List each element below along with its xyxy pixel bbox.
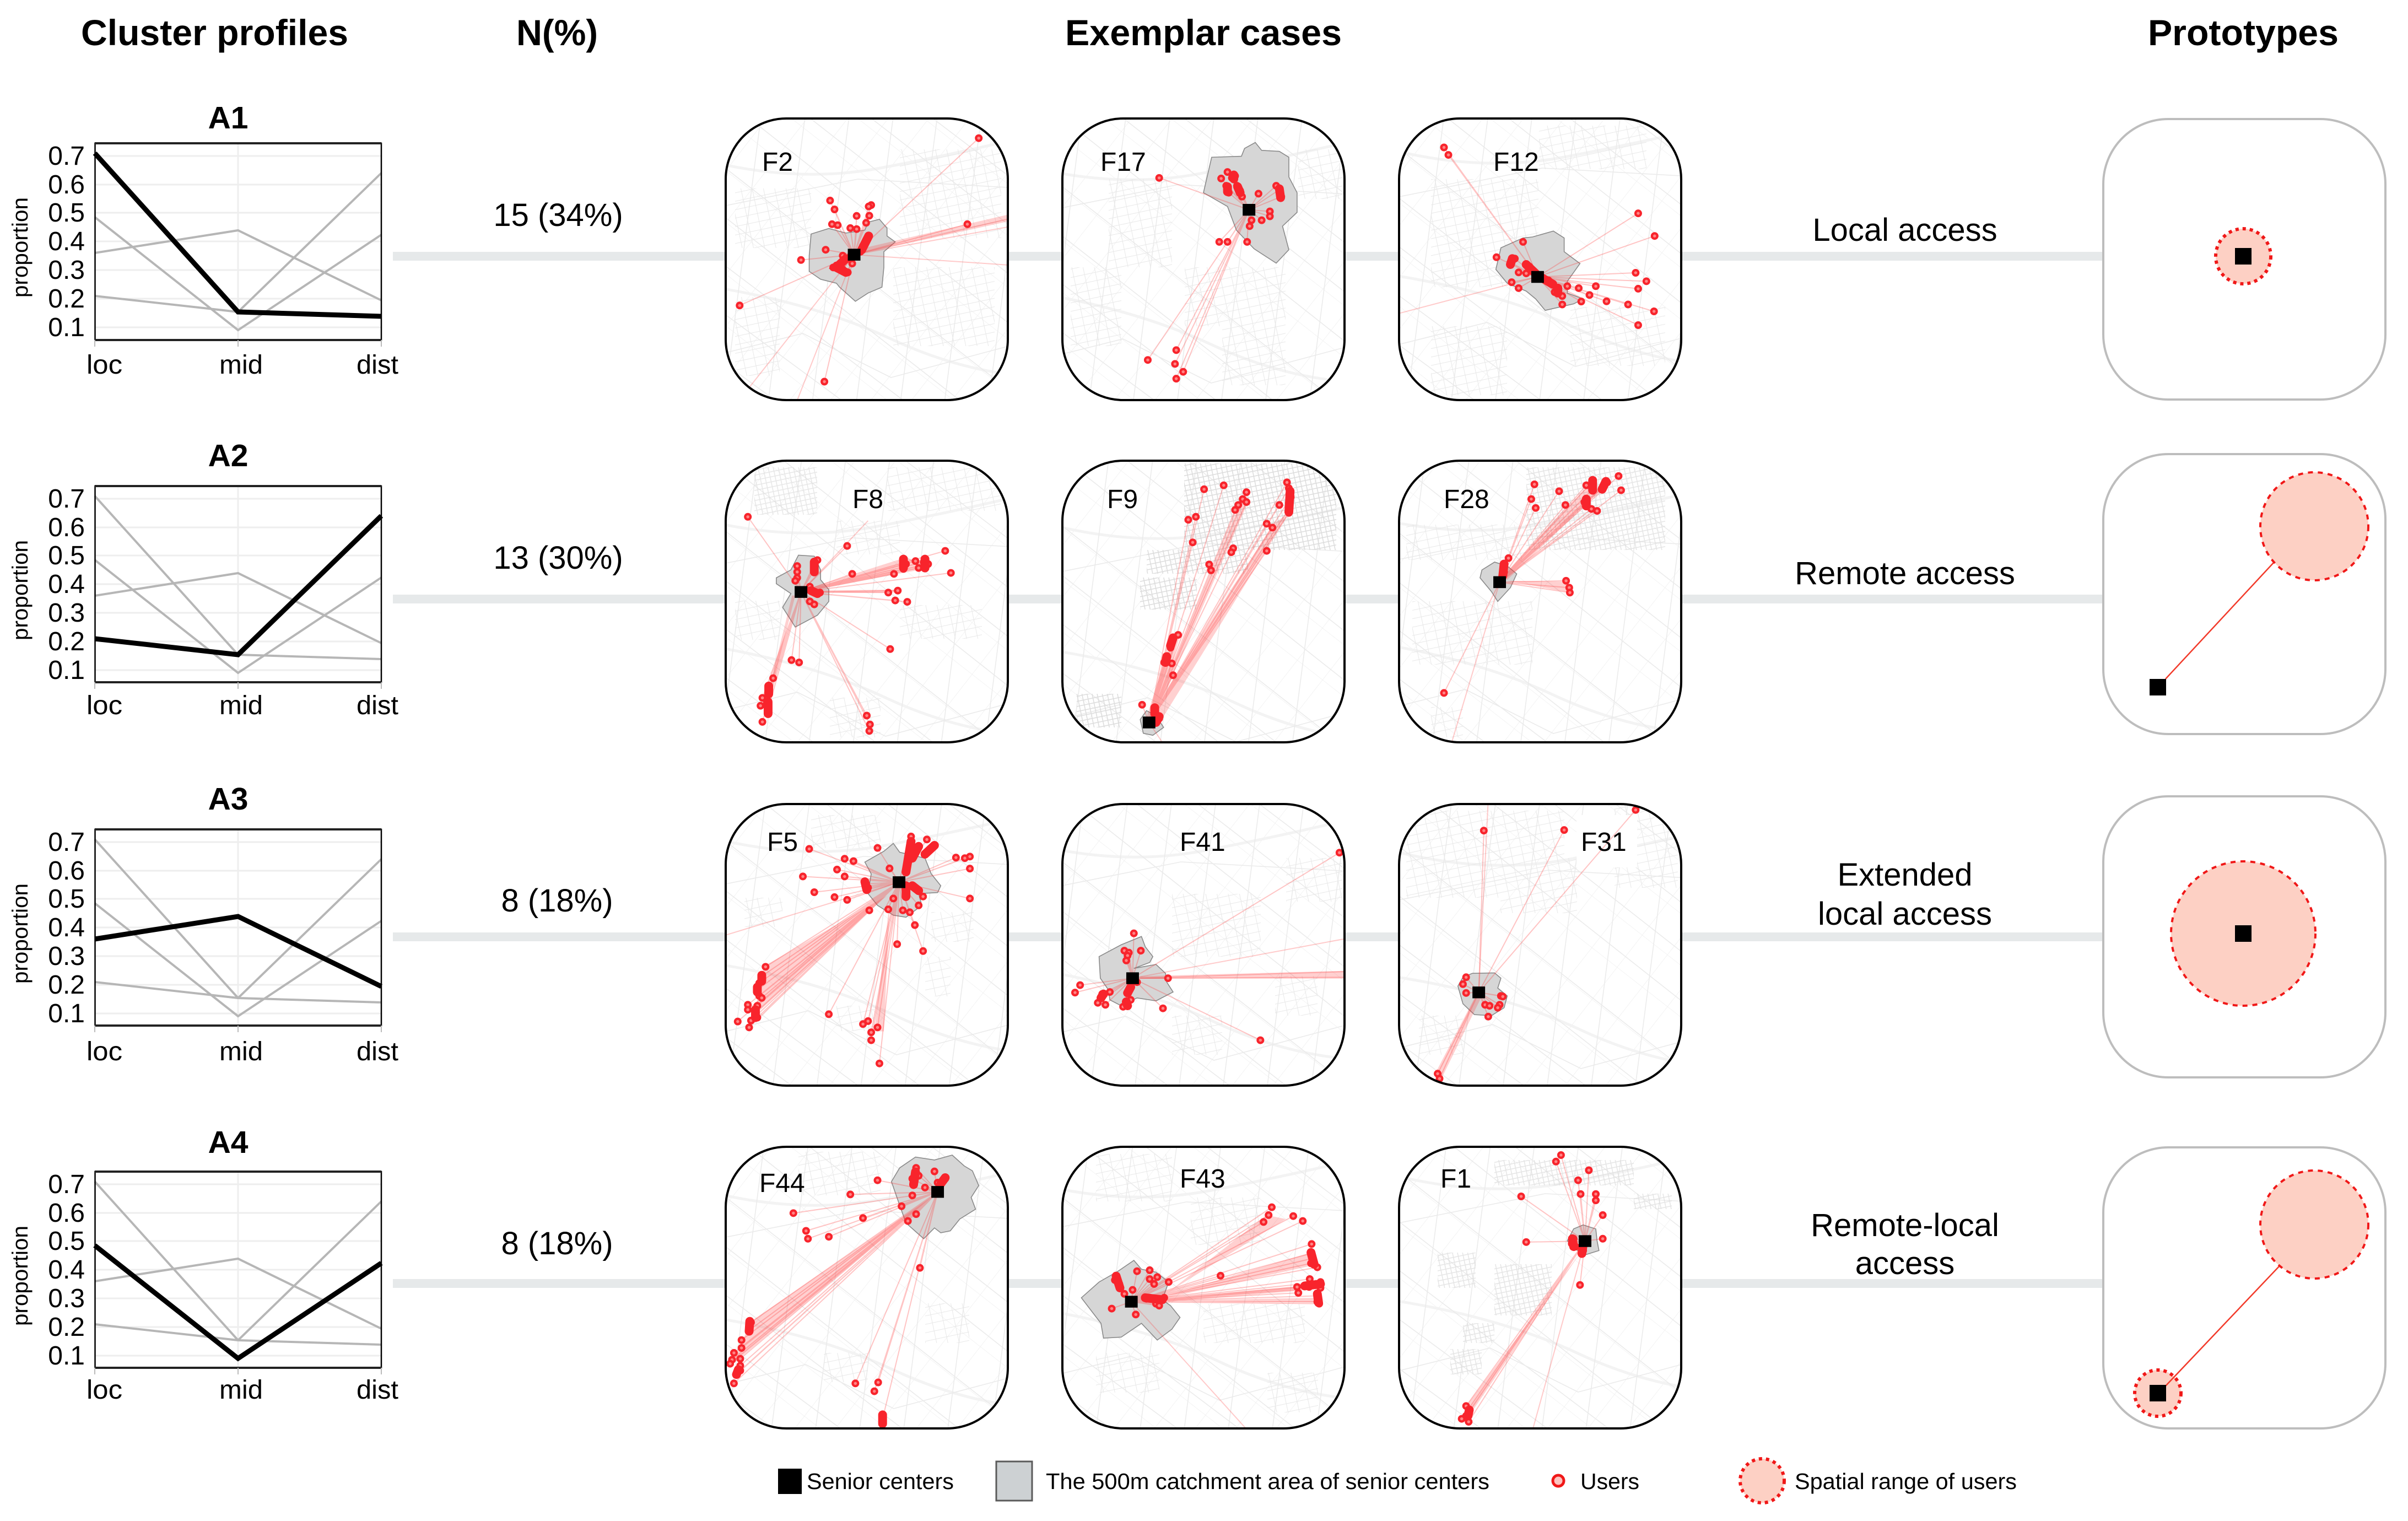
map panel: F44 <box>725 1146 1009 1430</box>
connector band: row A1 <box>393 252 2103 261</box>
chart: cluster profile A3: dist <box>357 1037 398 1066</box>
chart: cluster profile A1: loc <box>87 350 122 380</box>
legend: users <box>1553 1469 1639 1494</box>
prototype panel: remote access <box>2103 454 2385 734</box>
chart: cluster profile A2: 0.5 <box>48 541 85 570</box>
chart: cluster profile A3: 0.7 <box>48 828 85 857</box>
prototype label: Local access: Local access <box>1812 212 1997 248</box>
chart: cluster profile A2: A2 <box>208 438 248 473</box>
heading: Cluster profiles: Cluster profiles <box>81 12 348 53</box>
map panel: F28: F28 <box>1444 485 1489 514</box>
chart: cluster profile A4: mid <box>219 1376 263 1405</box>
map panel: F41: F41 <box>1180 828 1225 857</box>
connector band: row A4 <box>393 1279 2103 1288</box>
map panel: F17: F17 <box>1100 148 1146 177</box>
chart: cluster profile A1: A1 <box>208 100 248 136</box>
map panel: F1 <box>1363 1100 1743 1453</box>
map panel: F43: F43 <box>1180 1164 1225 1194</box>
chart: cluster profile A4: dist <box>357 1376 398 1405</box>
chart: cluster profile A2: 0.1 <box>48 656 85 685</box>
chart: cluster profile A1: 0.4 <box>48 227 85 256</box>
prototype label: Extended local access <box>1818 857 1992 932</box>
map panel: F31 <box>1398 803 1682 1087</box>
chart: cluster profile A1 <box>8 100 398 380</box>
chart: cluster profile A2: loc <box>87 691 122 720</box>
prototype panel: extended local access <box>2103 796 2385 1077</box>
map panel: F41 <box>1061 803 1346 1087</box>
chart: cluster profile A1: 0.7 <box>48 142 85 171</box>
map panel: F43 <box>1061 1146 1346 1430</box>
chart: cluster profile A1: 0.6 <box>48 170 85 199</box>
heading: N(%): N(%) <box>516 12 598 53</box>
prototype label: Remote-local access: Remote-local <box>1811 1207 1999 1243</box>
chart: cluster profile A2: 0.7 <box>48 484 85 514</box>
prototype label: Remote-local access <box>1811 1207 1999 1281</box>
chart: cluster profile A2: 0.2 <box>48 627 85 656</box>
chart: cluster profile A3: loc <box>87 1037 122 1066</box>
chart: cluster profile A1: 0.2 <box>48 284 85 314</box>
chart: cluster profile A4: loc <box>87 1376 122 1405</box>
map panel: F12 <box>1398 117 1682 401</box>
chart: cluster profile A4: 0.7 <box>48 1170 85 1199</box>
map panel: F2: F2 <box>762 148 793 177</box>
chart: cluster profile A4 <box>8 1125 398 1405</box>
map panel: F8: F8 <box>852 485 883 514</box>
map panel: F17 <box>1061 117 1346 401</box>
map panel: F5: F5 <box>767 828 798 857</box>
map panel: F1: F1 <box>1440 1164 1471 1194</box>
chart: cluster profile A4: 0.2 <box>48 1313 85 1342</box>
legend: catchment area: The 500m catchment area of senior centers <box>1046 1469 1489 1494</box>
chart: cluster profile A2: 0.6 <box>48 513 85 542</box>
prototype panel: remote-local access <box>2103 1147 2385 1428</box>
map panel: F12: F12 <box>1493 148 1539 177</box>
chart: cluster profile A3: A3 <box>208 781 248 817</box>
N value: A1: 15 (34%) <box>493 197 623 233</box>
map panel: F5 <box>725 803 1009 1087</box>
connector band: row A2 <box>393 595 2103 603</box>
legend: users: Users <box>1580 1469 1639 1494</box>
chart: cluster profile A4: 0.6 <box>48 1199 85 1228</box>
prototype label: Extended local access: local access <box>1818 896 1992 932</box>
chart: cluster profile A2 <box>8 438 398 720</box>
connector band: row A3 <box>393 932 2103 941</box>
chart: cluster profile A1: dist <box>357 350 398 380</box>
legend: spatial range of users <box>1740 1459 2017 1503</box>
chart: cluster profile A4: 0.5 <box>48 1227 85 1256</box>
prototype label: Extended local access: Extended <box>1837 857 1973 893</box>
prototype label: Remote-local access: access <box>1855 1245 1955 1281</box>
map panel: F31: F31 <box>1581 828 1627 857</box>
chart: cluster profile A1: mid <box>219 350 263 380</box>
chart: cluster profile A2: dist <box>357 691 398 720</box>
map panel: F44: F44 <box>759 1169 805 1198</box>
prototype panel: local access <box>2103 119 2385 400</box>
chart: cluster profile A3: proportion <box>8 883 33 984</box>
map panel: F9 <box>1061 460 1346 743</box>
chart: cluster profile A3: 0.3 <box>48 942 85 971</box>
legend: spatial range of users: Spatial range of users <box>1795 1469 2017 1494</box>
map panel: F2 <box>725 117 1009 401</box>
legend: senior centers: Senior centers <box>807 1469 954 1494</box>
chart: cluster profile A2: proportion <box>8 540 33 640</box>
chart: cluster profile A3: 0.2 <box>48 970 85 1000</box>
prototype label: Remote access: Remote access <box>1795 555 2015 591</box>
chart: cluster profile A3: 0.1 <box>48 999 85 1028</box>
N value: A3: 8 (18%) <box>501 883 613 919</box>
chart: cluster profile A3: 0.4 <box>48 913 85 942</box>
N value: A2: 13 (30%) <box>493 540 623 576</box>
heading: Prototypes: Prototypes <box>2148 12 2339 53</box>
chart: cluster profile A2: 0.3 <box>48 598 85 628</box>
map panel: F28 <box>1398 460 1682 743</box>
chart: cluster profile A4: A4 <box>208 1125 249 1160</box>
chart: cluster profile A3: mid <box>219 1037 263 1066</box>
chart: cluster profile A4: 0.1 <box>48 1341 85 1371</box>
chart: cluster profile A4: 0.3 <box>48 1284 85 1313</box>
chart: cluster profile A1: proportion <box>8 197 33 298</box>
heading: Exemplar cases: Exemplar cases <box>1065 12 1342 53</box>
chart: cluster profile A1: 0.5 <box>48 198 85 228</box>
N value: A4: 8 (18%) <box>501 1226 613 1261</box>
legend <box>778 1459 2017 1503</box>
map panel: F9: F9 <box>1107 485 1138 514</box>
map panel: F8 <box>725 460 1009 743</box>
chart: cluster profile A3: 0.5 <box>48 884 85 914</box>
chart: cluster profile A3 <box>8 781 398 1066</box>
chart: cluster profile A1: 0.1 <box>48 313 85 342</box>
chart: cluster profile A4: 0.4 <box>48 1255 85 1285</box>
chart: cluster profile A3: 0.6 <box>48 856 85 886</box>
chart: cluster profile A1: 0.3 <box>48 256 85 285</box>
legend: catchment area <box>996 1461 1489 1501</box>
chart: cluster profile A2: 0.4 <box>48 570 85 599</box>
chart: cluster profile A4: proportion <box>8 1226 33 1326</box>
chart: cluster profile A2: mid <box>219 691 263 720</box>
